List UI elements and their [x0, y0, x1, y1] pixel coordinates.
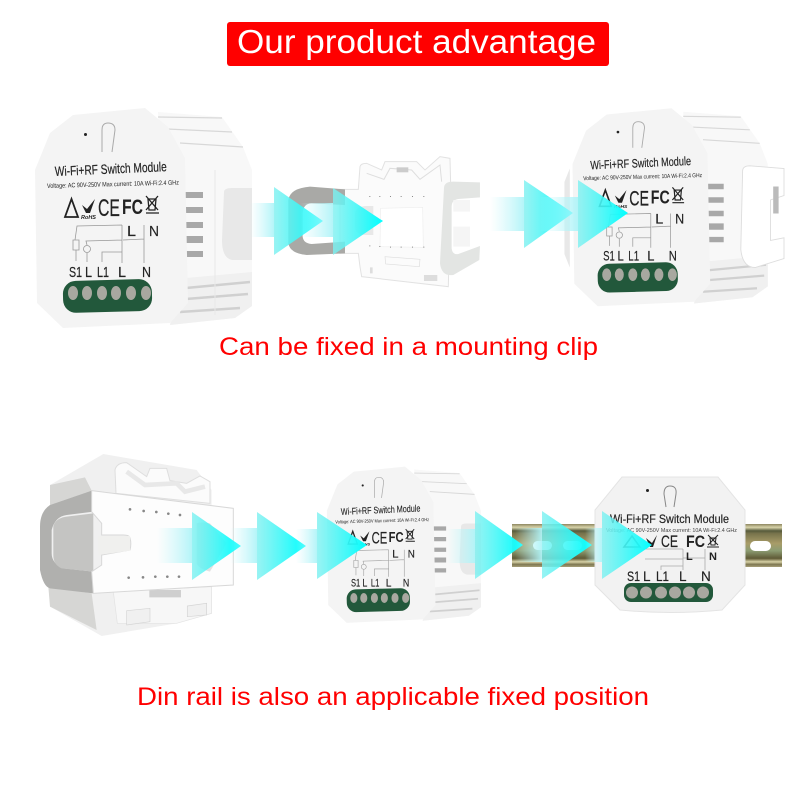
module: bottom middle: CE: [372, 528, 387, 547]
module: front view on rail: S1: [627, 569, 640, 584]
module: bottom middle: L: [386, 578, 392, 590]
module: top right: S1: [603, 248, 615, 263]
module: top left: [35, 108, 252, 328]
module: front view on rail: CE: [661, 532, 678, 551]
module: bottom middle: FC: [389, 530, 404, 546]
module: bottom middle: N: [408, 549, 415, 561]
module: front view on rail: N: [701, 569, 711, 584]
module: top right: [564, 108, 784, 306]
arrows: top row: [250, 180, 628, 255]
module: front view on rail: L: [679, 569, 687, 584]
arrows: bottom row: [157, 511, 652, 580]
module: front view on rail: L1: [656, 569, 669, 584]
module: top right: L: [647, 248, 655, 263]
module: bottom middle: N: [403, 578, 409, 590]
module: front view on rail: Voltage: AC 90V-250V Max current: 10A Wi-Fi:2.4 GHz: [606, 528, 737, 534]
module: top left: L: [118, 264, 126, 281]
title banner: Our product advantage: [237, 23, 596, 60]
module: top right: RoHS: [614, 204, 628, 210]
module: bottom middle: L1: [371, 578, 379, 590]
module: top right: Voltage: AC 90V-250V Max current: 10A Wi-Fi:2.4 GHz: [583, 173, 702, 182]
module: top left: Voltage: AC 90V-250V Max current: 10A Wi-Fi:2.4 GHz: [47, 180, 179, 190]
module: front view on rail: FC: [686, 532, 705, 551]
module: bottom middle: RoHS: [360, 541, 371, 546]
module: top right: CE: [629, 185, 649, 210]
module: top left: Wi-Fi+RF Switch Module: [54, 159, 167, 179]
module: top left: RoHS: [81, 215, 96, 221]
module: bottom middle: L: [362, 578, 367, 590]
mounting clip: top middle: [288, 157, 480, 287]
module: top left: N: [142, 264, 151, 281]
module: bottom middle: L: [392, 549, 399, 561]
module: bottom middle: S1: [351, 578, 360, 590]
module: top right: L1: [628, 248, 639, 263]
module: front view on rail: [595, 477, 745, 612]
module: top right: FC: [651, 188, 670, 209]
module: top left: CE: [98, 195, 120, 222]
module: front view on rail: L: [643, 569, 651, 584]
module: bottom middle: [327, 467, 481, 623]
module: top right: Wi-Fi+RF Switch Module: [590, 154, 692, 172]
module: front view on rail: N: [709, 551, 717, 563]
module: top left: L: [85, 264, 92, 281]
module: top right: L: [655, 211, 664, 226]
module: top right: N: [675, 211, 684, 226]
module: bottom middle: Voltage: AC 90V-250V Max current: 10A Wi-Fi:2.4 GHz: [335, 517, 430, 524]
module: top left: L1: [97, 264, 109, 281]
clip and module assembly: bottom left: [40, 454, 233, 636]
caption: din rail: Din rail is also an applicable fixed position: [137, 683, 649, 711]
din rail: bottom right: [512, 524, 782, 567]
module: top left: S1: [69, 264, 82, 281]
module: top left: N: [149, 223, 159, 240]
module: bottom middle: Wi-Fi+RF Switch Module: [341, 503, 421, 518]
module: top left: FC: [122, 196, 143, 219]
module: front view on rail: L: [686, 551, 693, 563]
caption: mounting clip: Can be fixed in a mounting clip: [219, 333, 598, 361]
module: top left: L: [127, 223, 136, 240]
module: top right: L: [617, 248, 624, 263]
module: front view on rail: Wi-Fi+RF Switch Module: [610, 512, 729, 526]
module: top right: N: [669, 248, 677, 263]
